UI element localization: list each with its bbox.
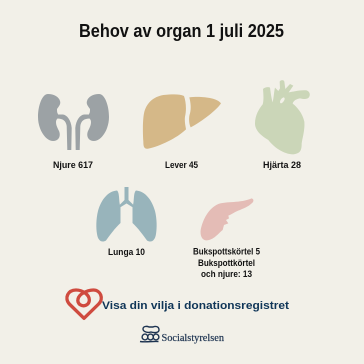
label: pancreas counts: och njure: 13	[201, 269, 252, 279]
icon: lungs	[96, 187, 157, 242]
label: pancreas counts: Bukspottkörtel	[198, 258, 255, 268]
icon: donation heart logo	[67, 290, 101, 318]
icon: liver	[143, 94, 221, 149]
label: Lever: Lever 45	[165, 160, 198, 170]
footer logo: Socialstyrelsen	[140, 326, 224, 344]
panel: liver	[143, 94, 221, 170]
panel: kidney	[38, 94, 109, 170]
panel: lung	[96, 187, 157, 257]
panel: heart	[255, 80, 310, 170]
label: Njure: Njure 617	[53, 160, 93, 170]
label: pancreas counts	[193, 246, 260, 279]
title: Behov av organ 1 juli 2025	[79, 21, 284, 41]
icon: pancreas	[201, 198, 253, 240]
icon: heart	[255, 80, 310, 154]
label: Lunga: Lunga 10	[108, 247, 145, 257]
label: pancreas counts: Bukspottskörtel 5	[193, 246, 260, 256]
label: Hjärta: Hjärta 28	[263, 160, 301, 170]
panel: pancreas	[193, 198, 260, 279]
icon: kidneys	[38, 94, 109, 150]
wordmark: Socialstyrelsen	[162, 333, 224, 344]
icon: emblem	[140, 326, 159, 342]
call to action: Visa din vilja i donationsregistret	[102, 300, 289, 312]
